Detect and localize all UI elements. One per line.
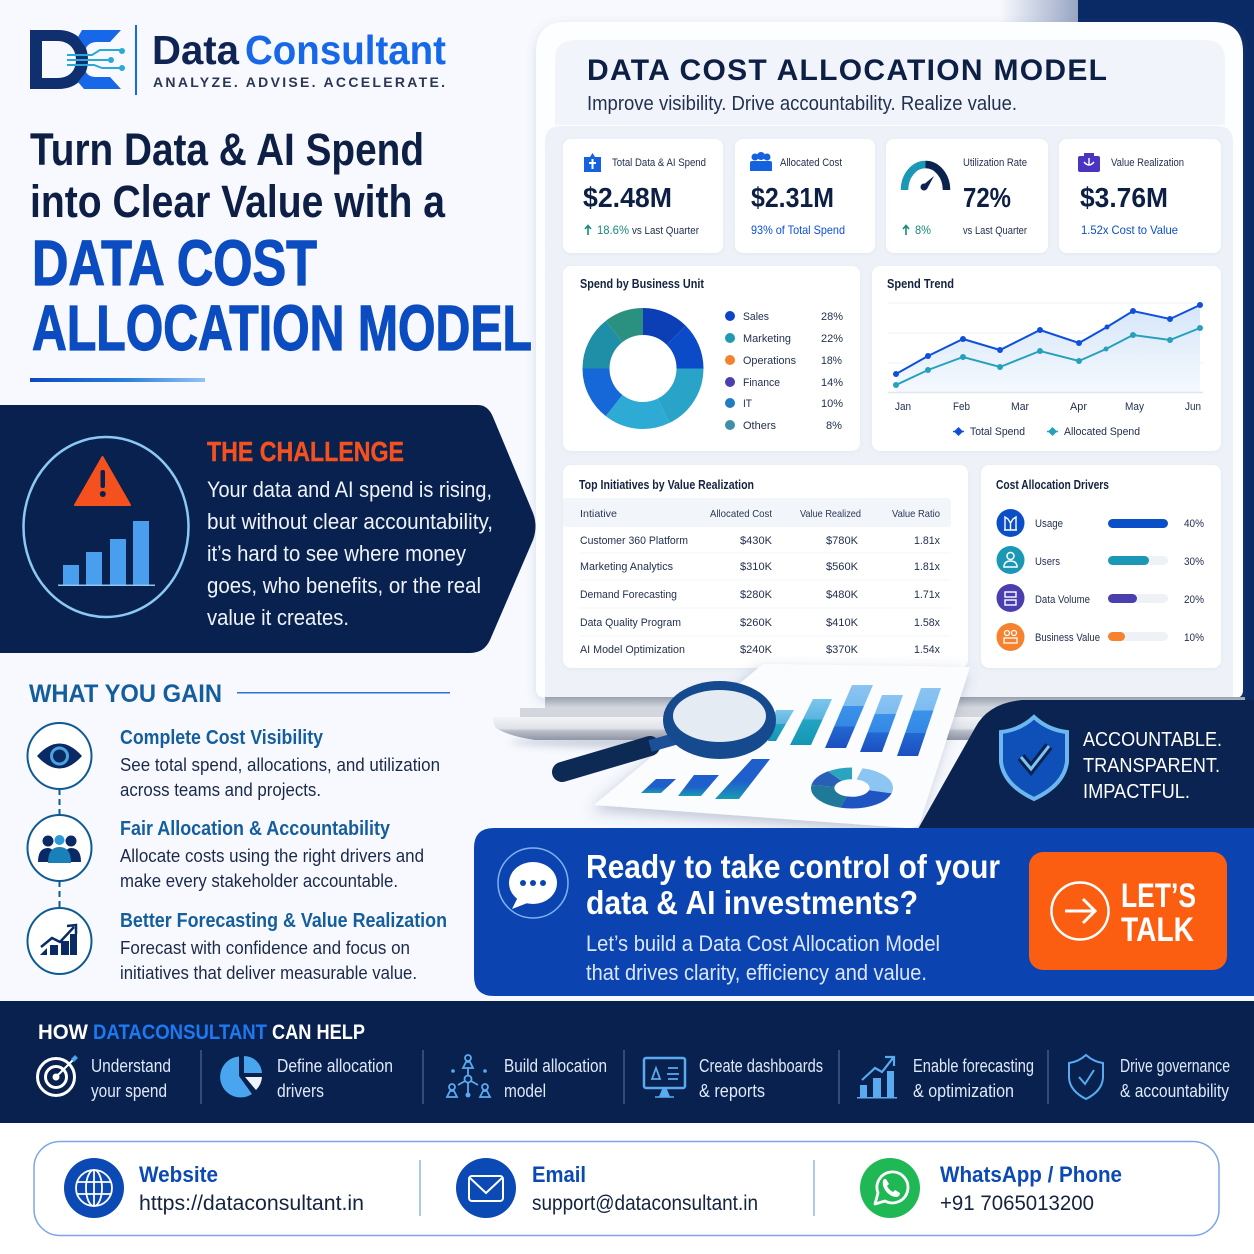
icon: chat bubble bbox=[498, 848, 568, 918]
paper bar chart bbox=[641, 685, 941, 799]
benefit: cost visibility bbox=[28, 723, 440, 800]
table rows: Customer 360 Platform bbox=[580, 535, 688, 547]
driver: business value: Business Value bbox=[1035, 632, 1100, 644]
panel: cost allocation drivers: Cost Allocation Drivers bbox=[996, 478, 1109, 492]
donut legend: 18% bbox=[821, 355, 842, 367]
badge: accountable: IMPACTFUL. bbox=[1083, 781, 1190, 803]
table rows: $560K bbox=[826, 561, 859, 573]
panel: contact footer bbox=[34, 1142, 1219, 1236]
KPI card: allocated cost: Allocated Cost bbox=[780, 157, 842, 169]
service: understand spend: Understand bbox=[91, 1056, 171, 1076]
button: let's talk bbox=[1029, 852, 1227, 970]
icon: shield bbox=[1001, 717, 1067, 799]
logo: ANALYZE. ADVISE. ACCELERATE. bbox=[153, 74, 445, 90]
call to action: data & AI investments? bbox=[586, 884, 918, 921]
KPI card: allocated cost bbox=[735, 139, 875, 253]
logo bbox=[30, 25, 446, 95]
service: dashboards: & reports bbox=[699, 1081, 765, 1101]
KPI card: utilization rate: vs Last Quarter bbox=[963, 225, 1027, 237]
benefit: fair allocation: make every stakeholder accountable. bbox=[120, 871, 398, 891]
table rows: Marketing Analytics bbox=[580, 561, 673, 573]
donut legend: 10% bbox=[821, 398, 843, 410]
panel: the challenge bbox=[0, 405, 536, 653]
service: define drivers bbox=[220, 1056, 393, 1101]
KPI card: total spend: vs Last Quarter bbox=[632, 225, 699, 237]
service: understand spend: your spend bbox=[91, 1081, 167, 1101]
contact: website: Website bbox=[139, 1162, 218, 1187]
panel: top initiatives table: Top Initiatives by Value Realization bbox=[579, 478, 754, 492]
service: define drivers: Define allocation bbox=[277, 1056, 393, 1076]
donut legend: Finance bbox=[743, 377, 780, 389]
KPI card: utilization rate: Utilization Rate bbox=[963, 157, 1027, 169]
KPI card: total spend: $2.48M bbox=[583, 182, 672, 213]
driver: users: Users bbox=[1035, 556, 1060, 568]
contact: website: https://dataconsultant.in bbox=[139, 1192, 364, 1215]
benefit: cost visibility: See total spend, allocations, and utilization bbox=[120, 755, 440, 775]
table header bbox=[580, 508, 940, 520]
donut legend: 28% bbox=[821, 311, 843, 323]
donut legend: Operations bbox=[743, 355, 796, 367]
table rows: $310K bbox=[740, 561, 773, 573]
KPI card: total spend: 18.6% bbox=[597, 223, 629, 237]
trend legend bbox=[953, 426, 1140, 438]
table rows: $410K bbox=[826, 617, 859, 629]
challenge text: but without clear accountability, bbox=[207, 509, 493, 534]
line chart bbox=[888, 302, 1203, 392]
service: forecasting: & optimization bbox=[913, 1081, 1014, 1101]
benefit: cost visibility: Complete Cost Visibility bbox=[120, 727, 324, 749]
contact: whatsapp: +91 7065013200 bbox=[940, 1192, 1094, 1215]
panel: spend trend: Spend Trend bbox=[887, 277, 954, 291]
table rows: $430K bbox=[740, 535, 773, 547]
button: let's talk: TALK bbox=[1121, 911, 1194, 949]
icon: warning and rising bars bbox=[24, 437, 188, 617]
benefit: better forecasting: Forecast with confidence and focus on bbox=[120, 938, 410, 958]
driver: data volume: Data Volume bbox=[1035, 594, 1090, 606]
panel: laptop dashboard bbox=[536, 22, 1243, 698]
driver: business value bbox=[996, 623, 1204, 651]
contact: website bbox=[64, 1158, 364, 1218]
driver: usage: Usage bbox=[1035, 518, 1063, 530]
heading: DATACONSULTANT bbox=[93, 1021, 267, 1044]
table rows: $260K bbox=[740, 617, 773, 629]
call to action: that drives clarity, efficiency and value. bbox=[586, 960, 927, 985]
donut legend: Sales bbox=[743, 311, 769, 323]
challenge text: Your data and AI spend is rising, bbox=[207, 477, 492, 502]
benefit: fair allocation: Fair Allocation & Accountability bbox=[120, 818, 391, 840]
KPI card: value realization bbox=[1059, 139, 1221, 253]
table rows: 1.81x bbox=[914, 561, 940, 573]
benefit connectors bbox=[58, 789, 60, 908]
logo: Data bbox=[152, 27, 240, 73]
table rows: Data Quality Program bbox=[580, 617, 681, 629]
service: forecasting: Enable forecasting bbox=[913, 1056, 1034, 1076]
contact: whatsapp: WhatsApp / Phone bbox=[940, 1162, 1122, 1187]
table rows: AI Model Optimization bbox=[580, 644, 685, 656]
heading: CAN HELP bbox=[272, 1021, 365, 1044]
report paper with charts bbox=[594, 664, 970, 828]
benefit: fair allocation: Allocate costs using the right drivers and bbox=[120, 846, 424, 866]
trend legend: Total Spend bbox=[970, 426, 1025, 438]
table rows: 1.71x bbox=[914, 589, 940, 601]
x axis labels: Mar bbox=[1011, 401, 1029, 413]
title: DATA COST bbox=[32, 227, 317, 299]
x axis labels: May bbox=[1125, 401, 1144, 413]
KPI card: value realization: Value Realization bbox=[1111, 157, 1184, 169]
challenge text: it’s hard to see where money bbox=[207, 541, 466, 566]
KPI card: utilization rate bbox=[886, 139, 1048, 253]
donut legend: 22% bbox=[821, 333, 843, 345]
title bbox=[30, 124, 532, 382]
x axis labels bbox=[895, 401, 1201, 413]
x axis labels: Jan bbox=[895, 401, 911, 413]
table rows: 1.58x bbox=[914, 617, 940, 629]
call to action bbox=[474, 828, 1254, 996]
contact: email bbox=[456, 1158, 758, 1218]
heading bbox=[38, 1021, 365, 1044]
x axis labels: Jun bbox=[1185, 401, 1201, 413]
KPI card: value realization: $3.76M bbox=[1080, 182, 1168, 213]
heading: HOW bbox=[38, 1021, 88, 1044]
panel: cost allocation drivers bbox=[981, 465, 1221, 668]
call to action: Let’s build a Data Cost Allocation Model bbox=[586, 931, 940, 956]
table rows bbox=[580, 535, 940, 656]
driver: users: 30% bbox=[1184, 556, 1204, 568]
table rows: $780K bbox=[826, 535, 859, 547]
trend legend: Allocated Spend bbox=[1064, 426, 1140, 438]
challenge text: goes, who benefits, or the real bbox=[207, 573, 481, 598]
contact: email: support@dataconsultant.in bbox=[532, 1192, 758, 1215]
donut legend: 8% bbox=[826, 420, 842, 432]
table header: Allocated Cost bbox=[710, 508, 772, 520]
panel: spend trend bbox=[872, 266, 1221, 451]
donut legend: IT bbox=[743, 398, 752, 410]
service: governance bbox=[1069, 1055, 1230, 1101]
challenge text: value it creates. bbox=[207, 605, 349, 630]
driver: usage: 40% bbox=[1184, 518, 1204, 530]
KPI card: allocated cost: 93% of Total Spend bbox=[751, 223, 845, 237]
KPI card: value realization: 1.52x Cost to Value bbox=[1081, 223, 1178, 237]
service: forecasting bbox=[857, 1056, 1034, 1101]
benefit: better forecasting: initiatives that deliver measurable value. bbox=[120, 963, 417, 983]
service: governance: & accountability bbox=[1120, 1081, 1229, 1101]
heading: what you gain: WHAT YOU GAIN bbox=[29, 680, 222, 708]
dashboard header: DATA COST ALLOCATION MODEL bbox=[587, 54, 1107, 87]
panel: spend by business unit bbox=[563, 266, 860, 451]
table rows: $480K bbox=[826, 589, 859, 601]
title: Turn Data & AI Spend bbox=[30, 124, 424, 175]
badge: accountable: ACCOUNTABLE. bbox=[1083, 729, 1222, 751]
title: into Clear Value with a bbox=[30, 176, 446, 227]
table rows: Demand Forecasting bbox=[580, 589, 677, 601]
KPI card: total spend: Total Data & AI Spend bbox=[612, 157, 706, 169]
KPI card: total spend bbox=[563, 139, 723, 253]
driver: data volume: 20% bbox=[1184, 594, 1204, 606]
driver: data volume bbox=[996, 584, 1204, 612]
x axis labels: Feb bbox=[953, 401, 970, 413]
benefit: better forecasting bbox=[28, 908, 447, 983]
donut legend: Marketing bbox=[743, 333, 791, 345]
donut legend: 14% bbox=[821, 377, 843, 389]
benefit: fair allocation bbox=[28, 815, 424, 891]
panel: spend by business unit: Spend by Business Unit bbox=[580, 277, 705, 291]
benefit: better forecasting: Better Forecasting & Value Realization bbox=[120, 910, 447, 932]
table rows: $240K bbox=[740, 644, 773, 656]
button: let's talk: LET’S bbox=[1121, 877, 1196, 915]
dashboard header bbox=[555, 40, 1225, 125]
donut chart bbox=[596, 322, 690, 416]
service: build model: Build allocation bbox=[504, 1056, 607, 1076]
paper donut chart bbox=[823, 773, 881, 803]
benefit: cost visibility: across teams and projects. bbox=[120, 780, 321, 800]
contact: whatsapp bbox=[860, 1158, 1122, 1218]
table rows: 1.54x bbox=[914, 644, 940, 656]
table header: Value Realized bbox=[800, 508, 861, 520]
KPI card: utilization rate: 8% bbox=[915, 223, 931, 237]
table rows: $370K bbox=[826, 644, 859, 656]
gauge icon bbox=[904, 164, 946, 190]
KPI card: utilization rate: 72% bbox=[963, 182, 1011, 213]
badge: accountable: TRANSPARENT. bbox=[1083, 755, 1220, 777]
badge: accountable bbox=[918, 700, 1254, 829]
contact: email: Email bbox=[532, 1162, 586, 1187]
panel: how dataconsultant can help bbox=[0, 1001, 1254, 1123]
logo: Consultant bbox=[245, 27, 446, 73]
icon: magnifying glass bbox=[562, 681, 776, 772]
call to action: Ready to take control of your bbox=[586, 848, 1000, 885]
table rows: 1.81x bbox=[914, 535, 940, 547]
table rows: $280K bbox=[740, 589, 773, 601]
dashboard header: Improve visibility. Drive accountability. Realize value. bbox=[587, 92, 1017, 115]
title: ALLOCATION MODEL bbox=[32, 292, 532, 364]
donut legend bbox=[725, 311, 843, 432]
service: define drivers: drivers bbox=[277, 1081, 324, 1101]
laptop base bbox=[493, 697, 1245, 748]
challenge text bbox=[207, 477, 493, 630]
panel: top initiatives table bbox=[563, 465, 968, 668]
x axis labels: Apr bbox=[1070, 401, 1087, 413]
driver: users bbox=[996, 546, 1204, 574]
table header: Intiative bbox=[580, 508, 617, 520]
driver: business value: 10% bbox=[1184, 632, 1204, 644]
driver: usage bbox=[996, 509, 1204, 537]
service: build model bbox=[447, 1055, 607, 1101]
panel: the challenge: THE CHALLENGE bbox=[207, 436, 404, 467]
KPI card: allocated cost: $2.31M bbox=[751, 182, 834, 213]
table header: Value Ratio bbox=[892, 508, 940, 520]
donut legend: Others bbox=[743, 420, 776, 432]
service: understand spend bbox=[38, 1055, 171, 1101]
service: build model: model bbox=[504, 1081, 546, 1101]
service: dashboards bbox=[644, 1056, 823, 1101]
service: dashboards: Create dashboards bbox=[699, 1056, 823, 1076]
